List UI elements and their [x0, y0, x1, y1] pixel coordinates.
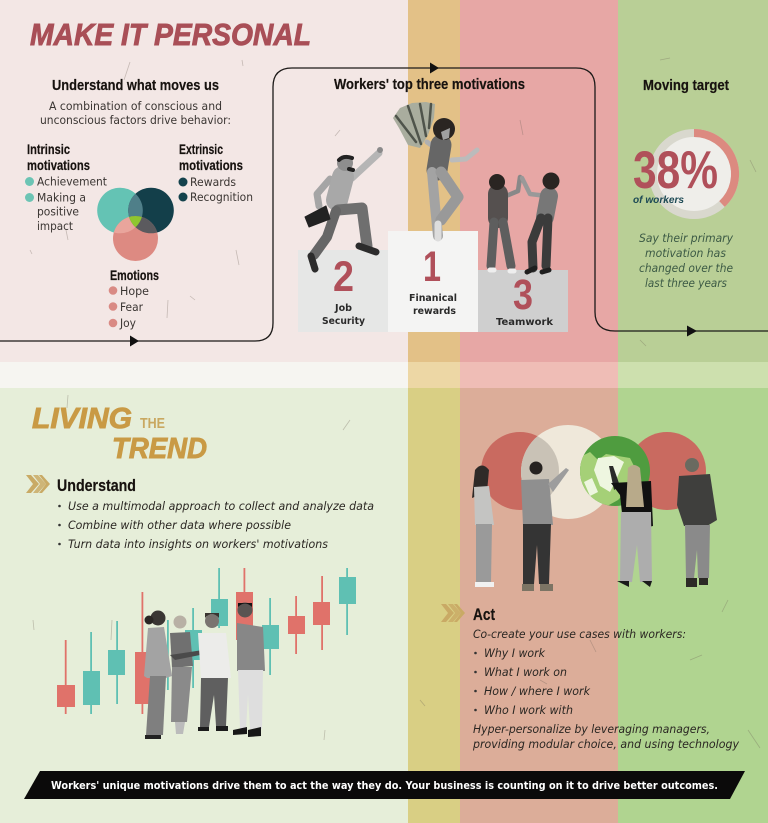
body text: What I work on [484, 665, 567, 679]
body text: Why I work [484, 646, 546, 660]
heading: Understand [57, 476, 136, 495]
intrinsic motivations [25, 142, 107, 233]
podium: rewards [413, 306, 456, 317]
intrinsic motivations: Making a [37, 190, 86, 204]
title: living the trend: LIVING [32, 403, 132, 435]
extrinsic motivations: Recognition [190, 190, 253, 204]
intrinsic motivations: Achievement [37, 174, 107, 188]
bottom banner [24, 771, 745, 799]
description: Say their primary [639, 231, 733, 245]
body text [472, 627, 739, 751]
emotions: Hope [120, 284, 149, 298]
podium: 3 [513, 271, 533, 319]
extrinsic motivations: Extrinsic [179, 142, 223, 157]
panel: understand what moves us [25, 77, 253, 330]
podium: Teamwork [496, 317, 553, 328]
stat label: of workers [633, 195, 684, 206]
emotions: Joy [119, 316, 136, 330]
bullet list: Turn data into insights on workers' motivations [68, 537, 328, 551]
figures: team reviewing documents [144, 602, 265, 739]
podium: Security [322, 316, 365, 327]
podium: 1 [423, 243, 441, 291]
title: living the trend: TREND [112, 433, 207, 465]
bullet list: Combine with other data where possible [68, 518, 291, 532]
donut chart: 38 percent [653, 133, 735, 215]
extrinsic motivations: motivations [179, 158, 243, 173]
emotions: Fear [120, 300, 143, 314]
intro text [40, 99, 231, 127]
podium: 2 [333, 253, 354, 301]
flow line with arrows [0, 62, 768, 346]
intro text: A combination of conscious and [49, 99, 222, 113]
figure: woman with cash fan [393, 102, 477, 238]
description: motivation has [645, 246, 726, 260]
heading: Workers' top three motivations [334, 76, 525, 93]
title: living the trend [32, 403, 207, 465]
body text: How / where I work [484, 684, 591, 698]
emotions: Emotions [110, 268, 159, 283]
extrinsic motivations: Rewards [190, 175, 236, 189]
title: living the trend: THE [140, 415, 165, 432]
candlestick chart [57, 568, 356, 714]
emotions [109, 268, 159, 330]
title: make it personal: MAKE IT PERSONAL [30, 17, 311, 52]
bullet list: Use a multimodal approach to collect and analyze data [68, 499, 374, 513]
body text: Co-create your use cases with workers: [473, 627, 686, 641]
panel: understand [26, 475, 374, 551]
body text: providing modular choice, and using technology [472, 737, 739, 751]
intrinsic motivations: motivations [27, 158, 90, 173]
figure: leaping man with briefcase [305, 147, 383, 269]
bullet list [58, 499, 374, 551]
figures: four people facing circles [472, 458, 717, 591]
panel: moving target [633, 77, 735, 290]
podium: Finanical [409, 293, 457, 304]
heading: Understand what moves us [52, 77, 219, 94]
figures: two women high-five [489, 172, 560, 272]
body text: Who I work with [484, 703, 573, 717]
heading: Act [473, 605, 495, 624]
overlapping circles illustration [481, 425, 706, 519]
intrinsic motivations: positive [37, 204, 79, 218]
icon: chevrons [441, 604, 465, 622]
description [639, 231, 733, 290]
intro text: unconscious factors drive behavior: [40, 113, 231, 127]
description: last three years [645, 276, 727, 290]
intrinsic motivations: Intrinsic [27, 142, 70, 157]
venn diagram [97, 188, 174, 261]
stat: 38%: 38% [633, 141, 718, 200]
panel: act [441, 604, 739, 751]
heading: Moving target [643, 77, 729, 94]
extrinsic motivations [178, 142, 253, 204]
body text: Hyper-personalize by leveraging managers, [473, 722, 710, 736]
podium: Job [334, 303, 352, 314]
podium [298, 231, 568, 332]
icon: chevrons [26, 475, 50, 493]
intrinsic motivations: impact [37, 219, 73, 233]
description: changed over the [639, 261, 733, 275]
panel: workers' top three motivations [298, 76, 568, 332]
